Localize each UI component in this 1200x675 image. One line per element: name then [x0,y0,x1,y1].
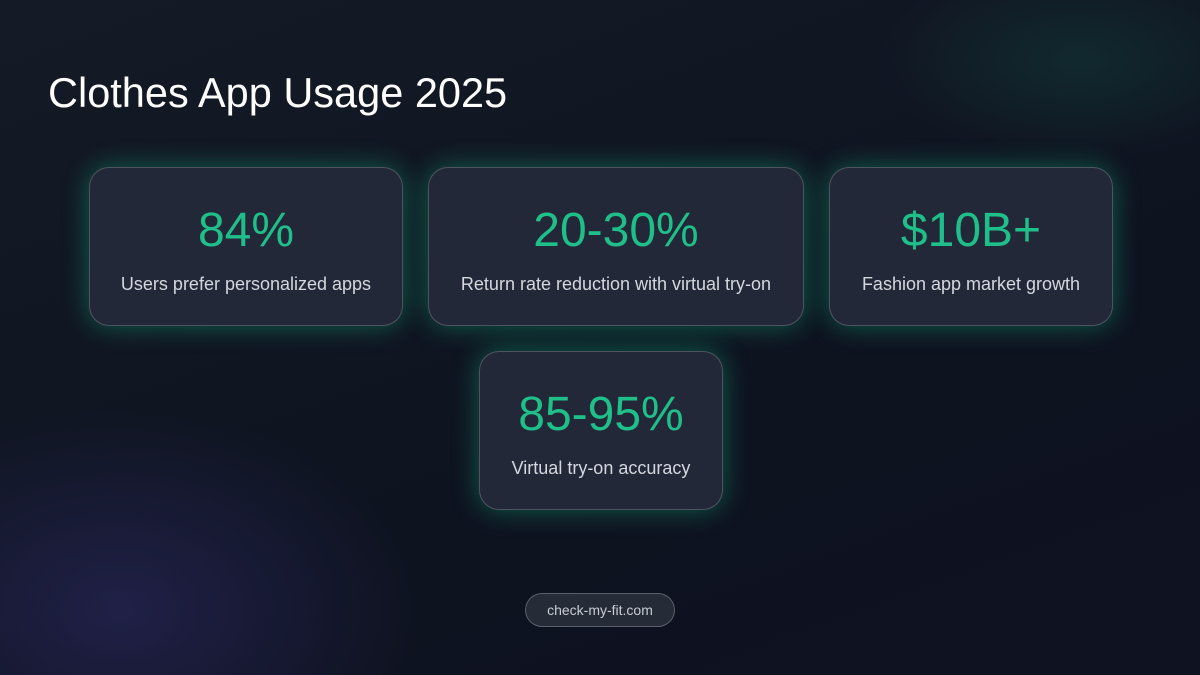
card: accuracy: 85-95% [518,388,684,441]
footer badge [525,593,675,627]
card: market growth [829,167,1113,326]
card: accuracy: Virtual try-on accuracy [512,458,690,478]
footer badge: check-my-fit.com [547,602,653,618]
card: personalized: 84% [198,204,294,257]
card: market growth: Fashion app market growth [862,274,1080,294]
card: personalized: Users prefer personalized apps [121,274,371,294]
card: return rate: Return rate reduction with virtual try-on [461,274,771,294]
card: personalized [89,167,403,326]
card: accuracy [479,351,723,510]
card: return rate [428,167,804,326]
card: market growth: $10B+ [901,204,1041,257]
card: return rate: 20-30% [533,204,699,257]
title: Clothes App Usage 2025 [48,69,507,116]
